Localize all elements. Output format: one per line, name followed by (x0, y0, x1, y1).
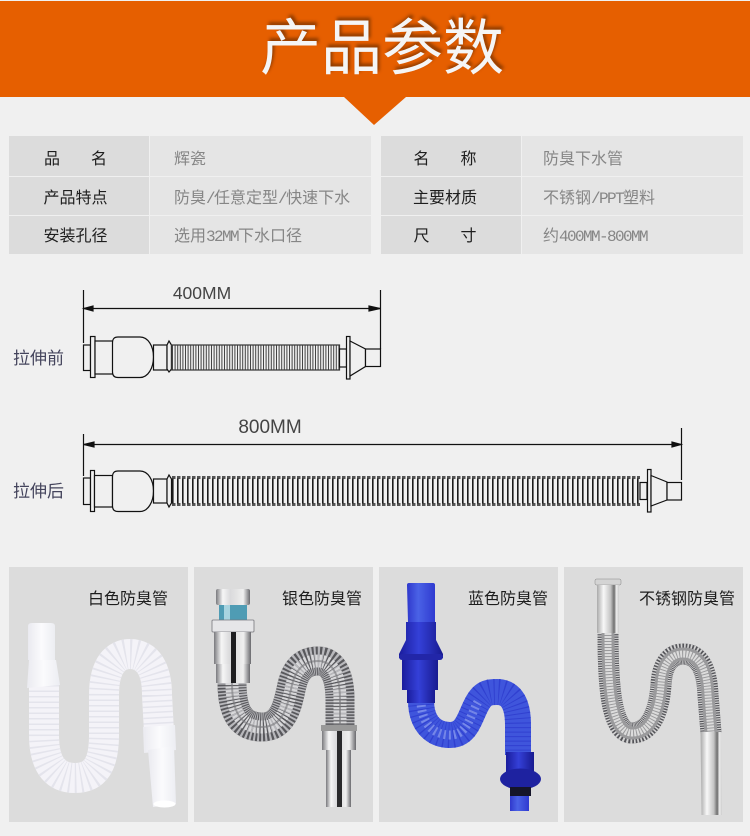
row: name (381, 136, 743, 176)
title: 产品参数 (260, 14, 504, 82)
label: after stretching: 拉伸后 (13, 482, 64, 501)
row: brand: 名 (91, 151, 107, 168)
row: size: 尺 (414, 228, 430, 244)
row: size (381, 216, 743, 254)
caption: white pipe: 白色防臭管 (88, 591, 168, 608)
panel: stainless pipe (564, 567, 743, 822)
row: name: 称 (460, 151, 476, 168)
caption: silver pipe: 银色防臭管 (282, 591, 362, 608)
header pointer triangle (344, 97, 406, 125)
row: features: 产品特点 (43, 190, 108, 207)
row: brand (9, 136, 371, 176)
pipe drawing compressed (84, 336, 380, 379)
parameter table: right (381, 136, 743, 254)
row: size: 寸 (460, 228, 476, 244)
dimension line 400MM (84, 290, 380, 349)
icon: blue pipe (399, 583, 541, 811)
row: hole diameter: 安装孔径 (43, 228, 108, 244)
row: name: 防臭下水管 (543, 151, 623, 168)
label: before stretching: 拉伸前 (13, 349, 64, 368)
row: hole diameter: 选用32MM下水口径 (174, 228, 302, 246)
header band (0, 1, 750, 97)
header banner (0, 1, 750, 97)
dimension line 800MM (84, 428, 682, 480)
diagram: before stretching 400MM (82, 283, 382, 380)
product illustrations (27, 578, 722, 815)
row: material: 不锈钢/PPT塑料 (543, 190, 655, 208)
row: material (381, 177, 743, 215)
icon: stainless pipe (595, 579, 722, 815)
row: features (9, 177, 371, 215)
panel: blue pipe (379, 567, 558, 822)
pipe drawing stretched (84, 470, 682, 512)
caption: blue pipe: 蓝色防臭管 (468, 591, 548, 608)
panel: silver pipe (194, 567, 373, 822)
dimension value 800MM: 800MM (238, 417, 302, 438)
row: material: 主要材质 (413, 190, 477, 207)
parameter table: left (9, 136, 371, 254)
icon: silver pipe (212, 589, 357, 807)
caption: stainless pipe: 不锈钢防臭管 (639, 591, 735, 608)
row: name: 名 (414, 151, 430, 168)
row: hole diameter (9, 216, 371, 254)
diagram: after stretching 800MM (82, 417, 683, 513)
dimension value 400MM: 400MM (173, 283, 231, 303)
row: size: 约400MM-800MM (543, 228, 647, 246)
panel: white pipe (9, 567, 188, 822)
row: brand: 品 (44, 151, 60, 168)
row: brand: 辉瓷 (174, 151, 206, 168)
row: features: 防臭/任意定型/快速下水 (174, 190, 350, 208)
icon: white pipe (27, 623, 176, 808)
